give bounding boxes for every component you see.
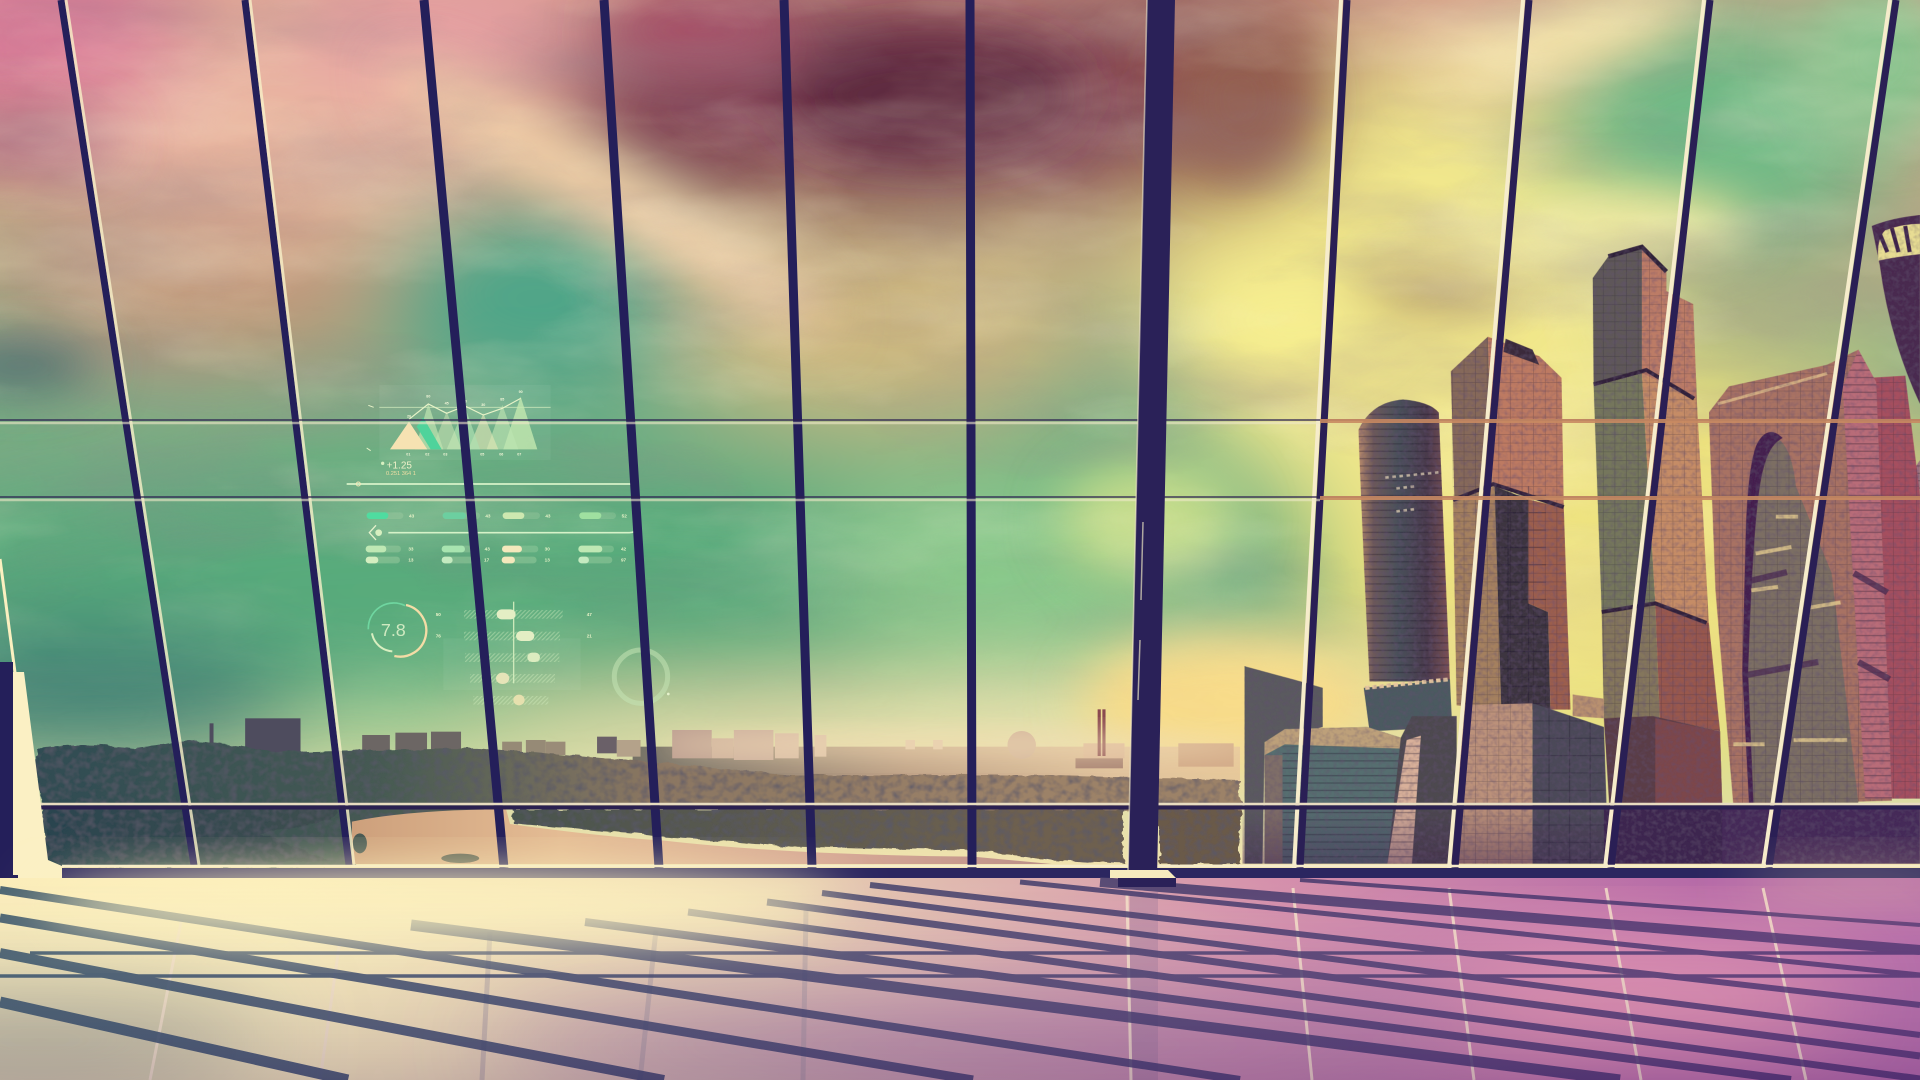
data dashboard hologram: peak chart panel: 04 — [462, 452, 467, 456]
data dashboard hologram: range dot chart: 47 — [587, 612, 592, 617]
tower: arch tower — [1709, 350, 1892, 805]
data dashboard hologram: peak chart panel: 45 — [445, 401, 449, 405]
data dashboard hologram: peak chart panel: 85 — [500, 397, 504, 401]
window sill — [62, 868, 1920, 878]
left corner pillar — [0, 662, 62, 892]
data dashboard hologram: bracket and progress bars: 97 — [621, 558, 627, 563]
data dashboard hologram: peak chart panel: 02 — [425, 452, 429, 456]
data dashboard hologram: peak chart panel — [367, 385, 551, 477]
data dashboard hologram: range dot chart: 76 — [436, 634, 441, 639]
tower: twisted tower far right — [1872, 215, 1920, 781]
data dashboard hologram: peak chart panel: 80 — [426, 395, 430, 399]
distant city and river landscape — [36, 709, 1240, 867]
data dashboard hologram: peak chart panel: 06 — [499, 452, 503, 456]
data dashboard hologram: peak chart panel: 90 — [463, 399, 467, 403]
floor with window shadows — [0, 871, 1920, 1080]
data dashboard hologram: bracket and progress bars: 52 — [622, 514, 627, 519]
central structural pillar — [1110, 0, 1176, 887]
data dashboard hologram: bracket and progress bars: 42 — [621, 547, 627, 552]
data dashboard hologram: peak chart panel: 0.251 364 1 — [386, 471, 416, 477]
tower: offset block tower — [1451, 337, 1570, 710]
data dashboard hologram: bracket and progress bars: 13 — [408, 558, 414, 563]
data dashboard hologram: bracket and progress bars: 17 — [484, 558, 490, 563]
data dashboard hologram: bracket and progress bars: 13 — [545, 558, 550, 563]
data dashboard hologram: peak chart panel: +1.25 — [387, 461, 412, 472]
data dashboard hologram: peak chart panel: 03 — [443, 452, 447, 456]
tower: tall twisted tower — [1593, 247, 1720, 731]
data dashboard hologram: peak chart panel: 07 — [517, 452, 521, 456]
horizon haze — [660, 731, 1260, 759]
data dashboard hologram: bracket and progress bars: 33 — [408, 547, 414, 552]
data dashboard hologram: ring gauge — [614, 650, 670, 703]
tower: red block behind arch tower — [1870, 376, 1920, 799]
data dashboard hologram: range dot chart — [436, 602, 592, 705]
data dashboard hologram: bracket and progress bars: 30 — [545, 547, 550, 552]
data dashboard hologram: bracket and progress bars: 43 — [409, 514, 415, 519]
data dashboard hologram: bracket and progress bars — [347, 482, 638, 563]
data dashboard hologram: range dot chart: 50 — [436, 612, 441, 617]
data dashboard hologram: range dot chart: 21 — [587, 634, 592, 639]
data dashboard hologram: peak chart panel: 05 — [480, 452, 484, 456]
skyscraper cluster — [1242, 215, 1920, 864]
data dashboard hologram: score gauge 7.8: 7.8 — [381, 620, 406, 640]
tower: round glass tower — [1358, 400, 1452, 731]
data dashboard hologram: score gauge 7.8 — [368, 603, 426, 657]
data dashboard hologram: peak chart panel: 20 — [407, 414, 411, 418]
low podium buildings — [1242, 666, 1920, 864]
data dashboard hologram: peak chart panel: 30 — [481, 403, 485, 407]
data dashboard hologram: bracket and progress bars: 43 — [545, 514, 551, 519]
data dashboard hologram: bracket and progress bars: 43 — [485, 547, 490, 552]
data dashboard hologram: bracket and progress bars: 43 — [485, 514, 491, 519]
data dashboard hologram: peak chart panel: 01 — [406, 452, 410, 456]
data dashboard hologram: peak chart panel: 90 — [519, 390, 523, 394]
